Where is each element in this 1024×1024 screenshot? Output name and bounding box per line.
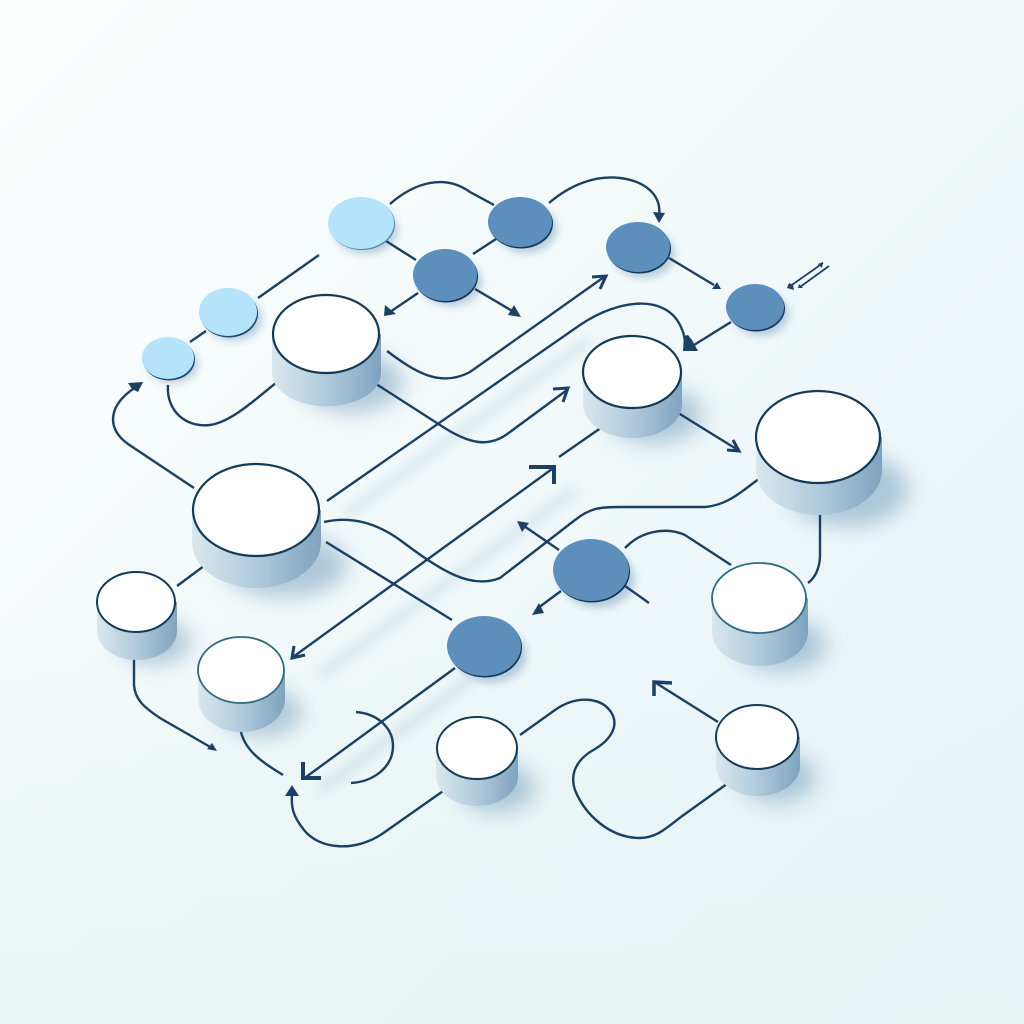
connectors and arrows xyxy=(113,177,829,846)
node: light circle 3 xyxy=(142,337,195,380)
cylinder node 9 xyxy=(716,705,800,796)
arrow: long diagonal double xyxy=(293,469,552,657)
arrow: curve up to small light node xyxy=(113,387,194,488)
cylinder node 8 xyxy=(436,717,518,806)
arrow: from top cylinder to right xyxy=(373,382,567,442)
arrow: small dark node to cylinder xyxy=(694,322,731,345)
cylinder node 1 xyxy=(272,295,381,406)
cylinder node 5 xyxy=(97,572,177,660)
connector: short to cylinder xyxy=(559,425,605,457)
arrow: curve under small light node xyxy=(168,378,282,425)
arrow: dark node up left xyxy=(524,526,559,550)
node: dark circle 2 xyxy=(413,249,478,302)
cylinder node 4 xyxy=(192,464,321,588)
node: dark circle 1 xyxy=(488,197,553,248)
soft shadows xyxy=(119,352,908,812)
connector: dark node right stub xyxy=(625,586,649,603)
arrow: double far right fragment xyxy=(789,263,823,287)
cylinder node 7 xyxy=(712,563,808,666)
node: dark circle 5 xyxy=(553,539,630,602)
arrow: long line curve to right cylinder xyxy=(327,304,685,501)
arrow: cylinder to right big cylinder xyxy=(675,411,738,450)
connector: light nodes xyxy=(190,331,206,342)
filled arrowheads xyxy=(128,212,823,796)
arrow: small cylinder down xyxy=(134,658,212,748)
arrow: dark node down right xyxy=(475,289,514,312)
node: light circle 2 xyxy=(199,288,258,338)
connector: cylinder to bottom xyxy=(240,727,283,775)
node: dark circle 4 xyxy=(726,284,785,332)
connector: main to small cylinder xyxy=(177,563,208,586)
arrow: right bottom cylinder up left xyxy=(656,683,718,722)
flat node shadows xyxy=(148,205,789,683)
connector: S curve bottom xyxy=(520,700,731,838)
arrow: bottom cylinder curve to left xyxy=(292,789,446,846)
arrow: long curve from top cylinder to upper right xyxy=(387,277,604,379)
cylinder node 3 xyxy=(756,391,882,515)
cylinder node 2 xyxy=(583,336,682,438)
connector: light node to dark node xyxy=(386,241,416,260)
connector: right cylinders xyxy=(808,512,820,583)
arrow: top arc to upper right node xyxy=(549,177,659,216)
arrow: dark node down left xyxy=(538,591,561,608)
arrow: light node line xyxy=(258,255,319,298)
arrow shadows xyxy=(320,340,590,790)
node: dark circle 6 xyxy=(447,616,522,678)
arrow: dark node to small dark node xyxy=(669,258,714,285)
node: dark circle 3 xyxy=(606,222,671,274)
arc: open curve xyxy=(351,712,393,783)
connector: dark node to dark node xyxy=(473,239,496,254)
cylinder node 6 xyxy=(198,637,285,732)
node: light circle 1 xyxy=(328,197,395,250)
connector: main cylinder to dark node xyxy=(326,542,452,620)
arrow: wave from main cylinder to big right cylinder xyxy=(324,476,763,582)
connector: dark node to cylinder curve xyxy=(625,531,731,565)
arrow: top arc between first nodes xyxy=(390,182,494,205)
arrow: dark node down left xyxy=(390,293,418,312)
arrow: dark node to lower left xyxy=(306,668,455,777)
